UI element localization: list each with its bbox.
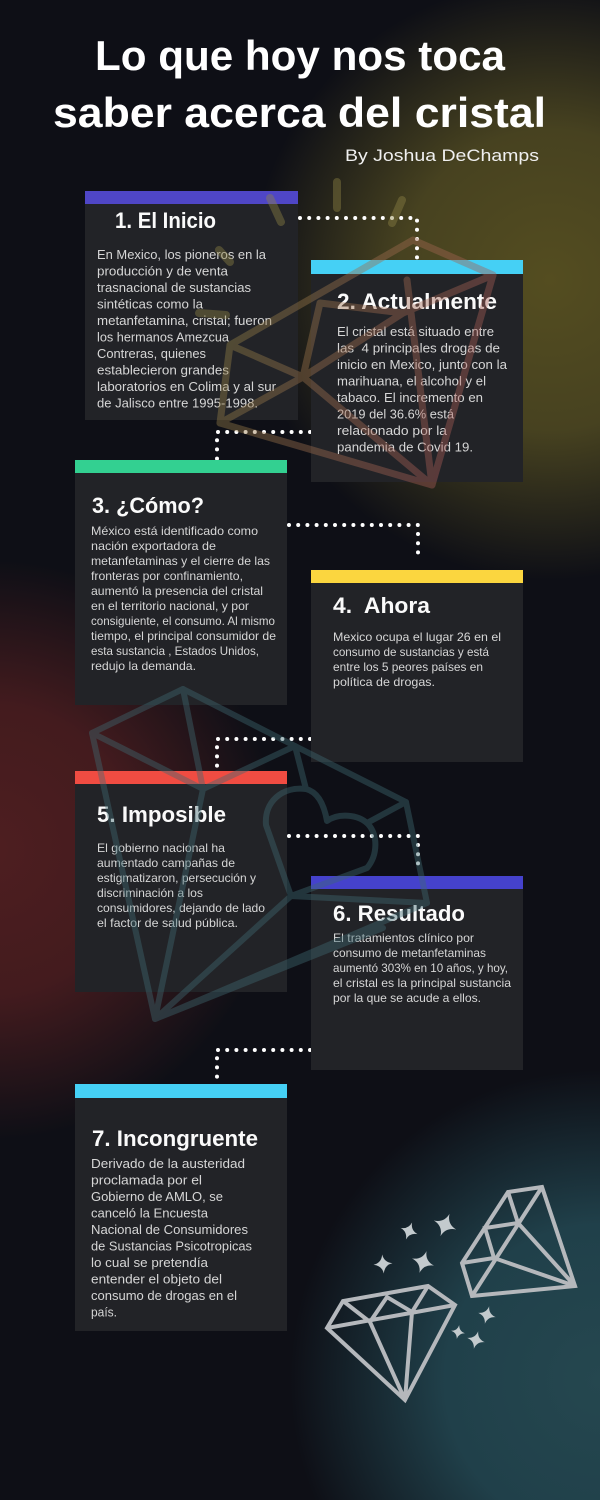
connector 6 to 7 <box>217 1050 310 1080</box>
body 7 <box>91 1157 252 1320</box>
body 2: las 4 principales drogas de <box>337 342 500 356</box>
body 7: canceló la Encuesta <box>91 1206 208 1220</box>
body 3: metanfetaminas y el cierre de las <box>91 554 270 568</box>
body 3: redujo la demanda. <box>91 659 196 673</box>
panel 7: Incongruente <box>75 1084 287 1331</box>
byline: By Joshua DeChamps <box>345 146 539 165</box>
body 3: aumentó la presencia del cristal <box>91 584 263 598</box>
heading 7: 7. Incongruente <box>92 1126 258 1151</box>
body 7: lo cual se pretendía <box>91 1256 208 1270</box>
panel 4: Ahora <box>311 570 523 762</box>
body 2 <box>337 325 507 454</box>
title: Lo que hoy nos toca <box>95 32 506 79</box>
heading 5: 5. Imposible <box>97 802 226 827</box>
body 2: relacionado por la <box>337 424 447 438</box>
heading 2: 2. Actualmente <box>337 289 497 314</box>
icon: diamond lower left <box>327 1286 455 1400</box>
body 5: aumentado campañas de <box>97 856 235 870</box>
panel 3: Como <box>75 460 287 705</box>
body 7: Gobierno de AMLO, se <box>91 1190 223 1204</box>
body 3: en el territorio nacional, y por <box>91 599 249 613</box>
body 6: por la que se acude a ellos. <box>333 991 481 1005</box>
heading 1: 1. El Inicio <box>115 208 216 233</box>
icon: translucent gem with rays <box>199 182 493 485</box>
body 1: producción y de venta <box>97 264 228 278</box>
body 6: aumentó 303% en 10 años, y hoy, <box>333 961 508 975</box>
body 7: consumo de drogas en el <box>91 1289 237 1303</box>
heading 4: 4. Ahora <box>333 593 431 618</box>
heading 3: 3. ¿Cómo? <box>92 493 204 518</box>
panel 1: El Inicio <box>85 191 298 420</box>
body 5: el factor de salud pública. <box>97 916 238 930</box>
connector 4 to 5 <box>217 739 310 767</box>
body 5 <box>97 841 265 930</box>
body 4 <box>333 630 501 689</box>
body 5: El gobierno nacional ha <box>97 841 225 855</box>
body 7: país. <box>91 1306 117 1320</box>
body 7: Nacional de Consumidores <box>91 1223 248 1237</box>
icon: diamond upper right <box>462 1187 575 1296</box>
panel 6: Resultado <box>311 876 523 1070</box>
body 7: entender el objeto del <box>91 1272 222 1286</box>
connector 2 to 3 <box>217 432 310 460</box>
body 1: laboratorios en Colima y al sur <box>97 380 276 394</box>
body 4: Mexico ocupa el lugar 26 en el <box>333 630 501 644</box>
connector 3 to 4 <box>289 525 418 560</box>
body 3: esta sustancia , Estados Unidos, <box>91 644 259 658</box>
body 7: Derivado de la austeridad <box>91 1157 245 1171</box>
body 6: El tratamientos clínico por <box>333 931 474 945</box>
heading 6: 6. Resultado <box>333 901 465 926</box>
body 4: entre los 5 peores países en <box>333 660 483 674</box>
body 6 <box>333 931 511 1005</box>
body 1: En Mexico, los pioneros en la <box>97 248 266 262</box>
body 3: fronteras por confinamiento, <box>91 569 243 583</box>
body 2: marihuana, el alcohol y el <box>337 374 486 388</box>
body 6: el cristal es la principal sustancia <box>333 976 511 990</box>
body 3 <box>91 524 276 673</box>
body 3: tiempo, el principal consumidor de <box>91 629 276 643</box>
icon: heart <box>266 789 375 896</box>
body 6: consumo de metanfetaminas <box>333 946 486 960</box>
body 1: establecieron grandes <box>97 364 229 378</box>
body 1: de Jalisco entre 1995-1998. <box>97 396 258 410</box>
body 2: El cristal está situado entre <box>337 325 494 339</box>
icon: translucent teal gem with heart <box>92 689 427 1019</box>
body 1 <box>97 248 276 410</box>
body 1: los hermanos Amezcua <box>97 330 229 344</box>
connector 1 to 2 <box>300 218 417 258</box>
body 1: Contreras, quienes <box>97 347 206 361</box>
body 2: inicio en Mexico, junto con la <box>337 358 507 372</box>
title second line: saber acerca del cristal <box>53 89 546 136</box>
icon: sparkles <box>373 1209 498 1351</box>
body 2: 2019 del 36.6% está <box>337 408 454 422</box>
body 2: tabaco. El incremento en <box>337 391 483 405</box>
panel 5: Imposible <box>75 771 287 992</box>
body 5: discriminación a los <box>97 886 203 900</box>
panel 2: Actualmente <box>311 260 523 482</box>
body 2: pandemia de Covid 19. <box>337 440 473 454</box>
connector 5 to 6 <box>289 836 418 872</box>
body 5: estigmatizaron, persecución y <box>97 871 256 885</box>
body 4: política de drogas. <box>333 675 435 689</box>
body 3: México está identificado como <box>91 524 258 538</box>
body 3: consiguiente, el consumo. Al mismo <box>91 614 275 628</box>
body 3: nación exportadora de <box>91 539 216 553</box>
body 7: de Sustancias Psicotropicas <box>91 1240 252 1254</box>
body 5: consumidores, dejando de lado <box>97 901 265 915</box>
body 1: sintéticas como la <box>97 298 203 312</box>
body 1: metanfetamina, cristal; fueron <box>97 314 272 328</box>
body 7: proclamada por el <box>91 1174 202 1188</box>
body 1: trasnacional de sustancias <box>97 281 251 295</box>
body 4: consumo de sustancias y está <box>333 645 489 659</box>
